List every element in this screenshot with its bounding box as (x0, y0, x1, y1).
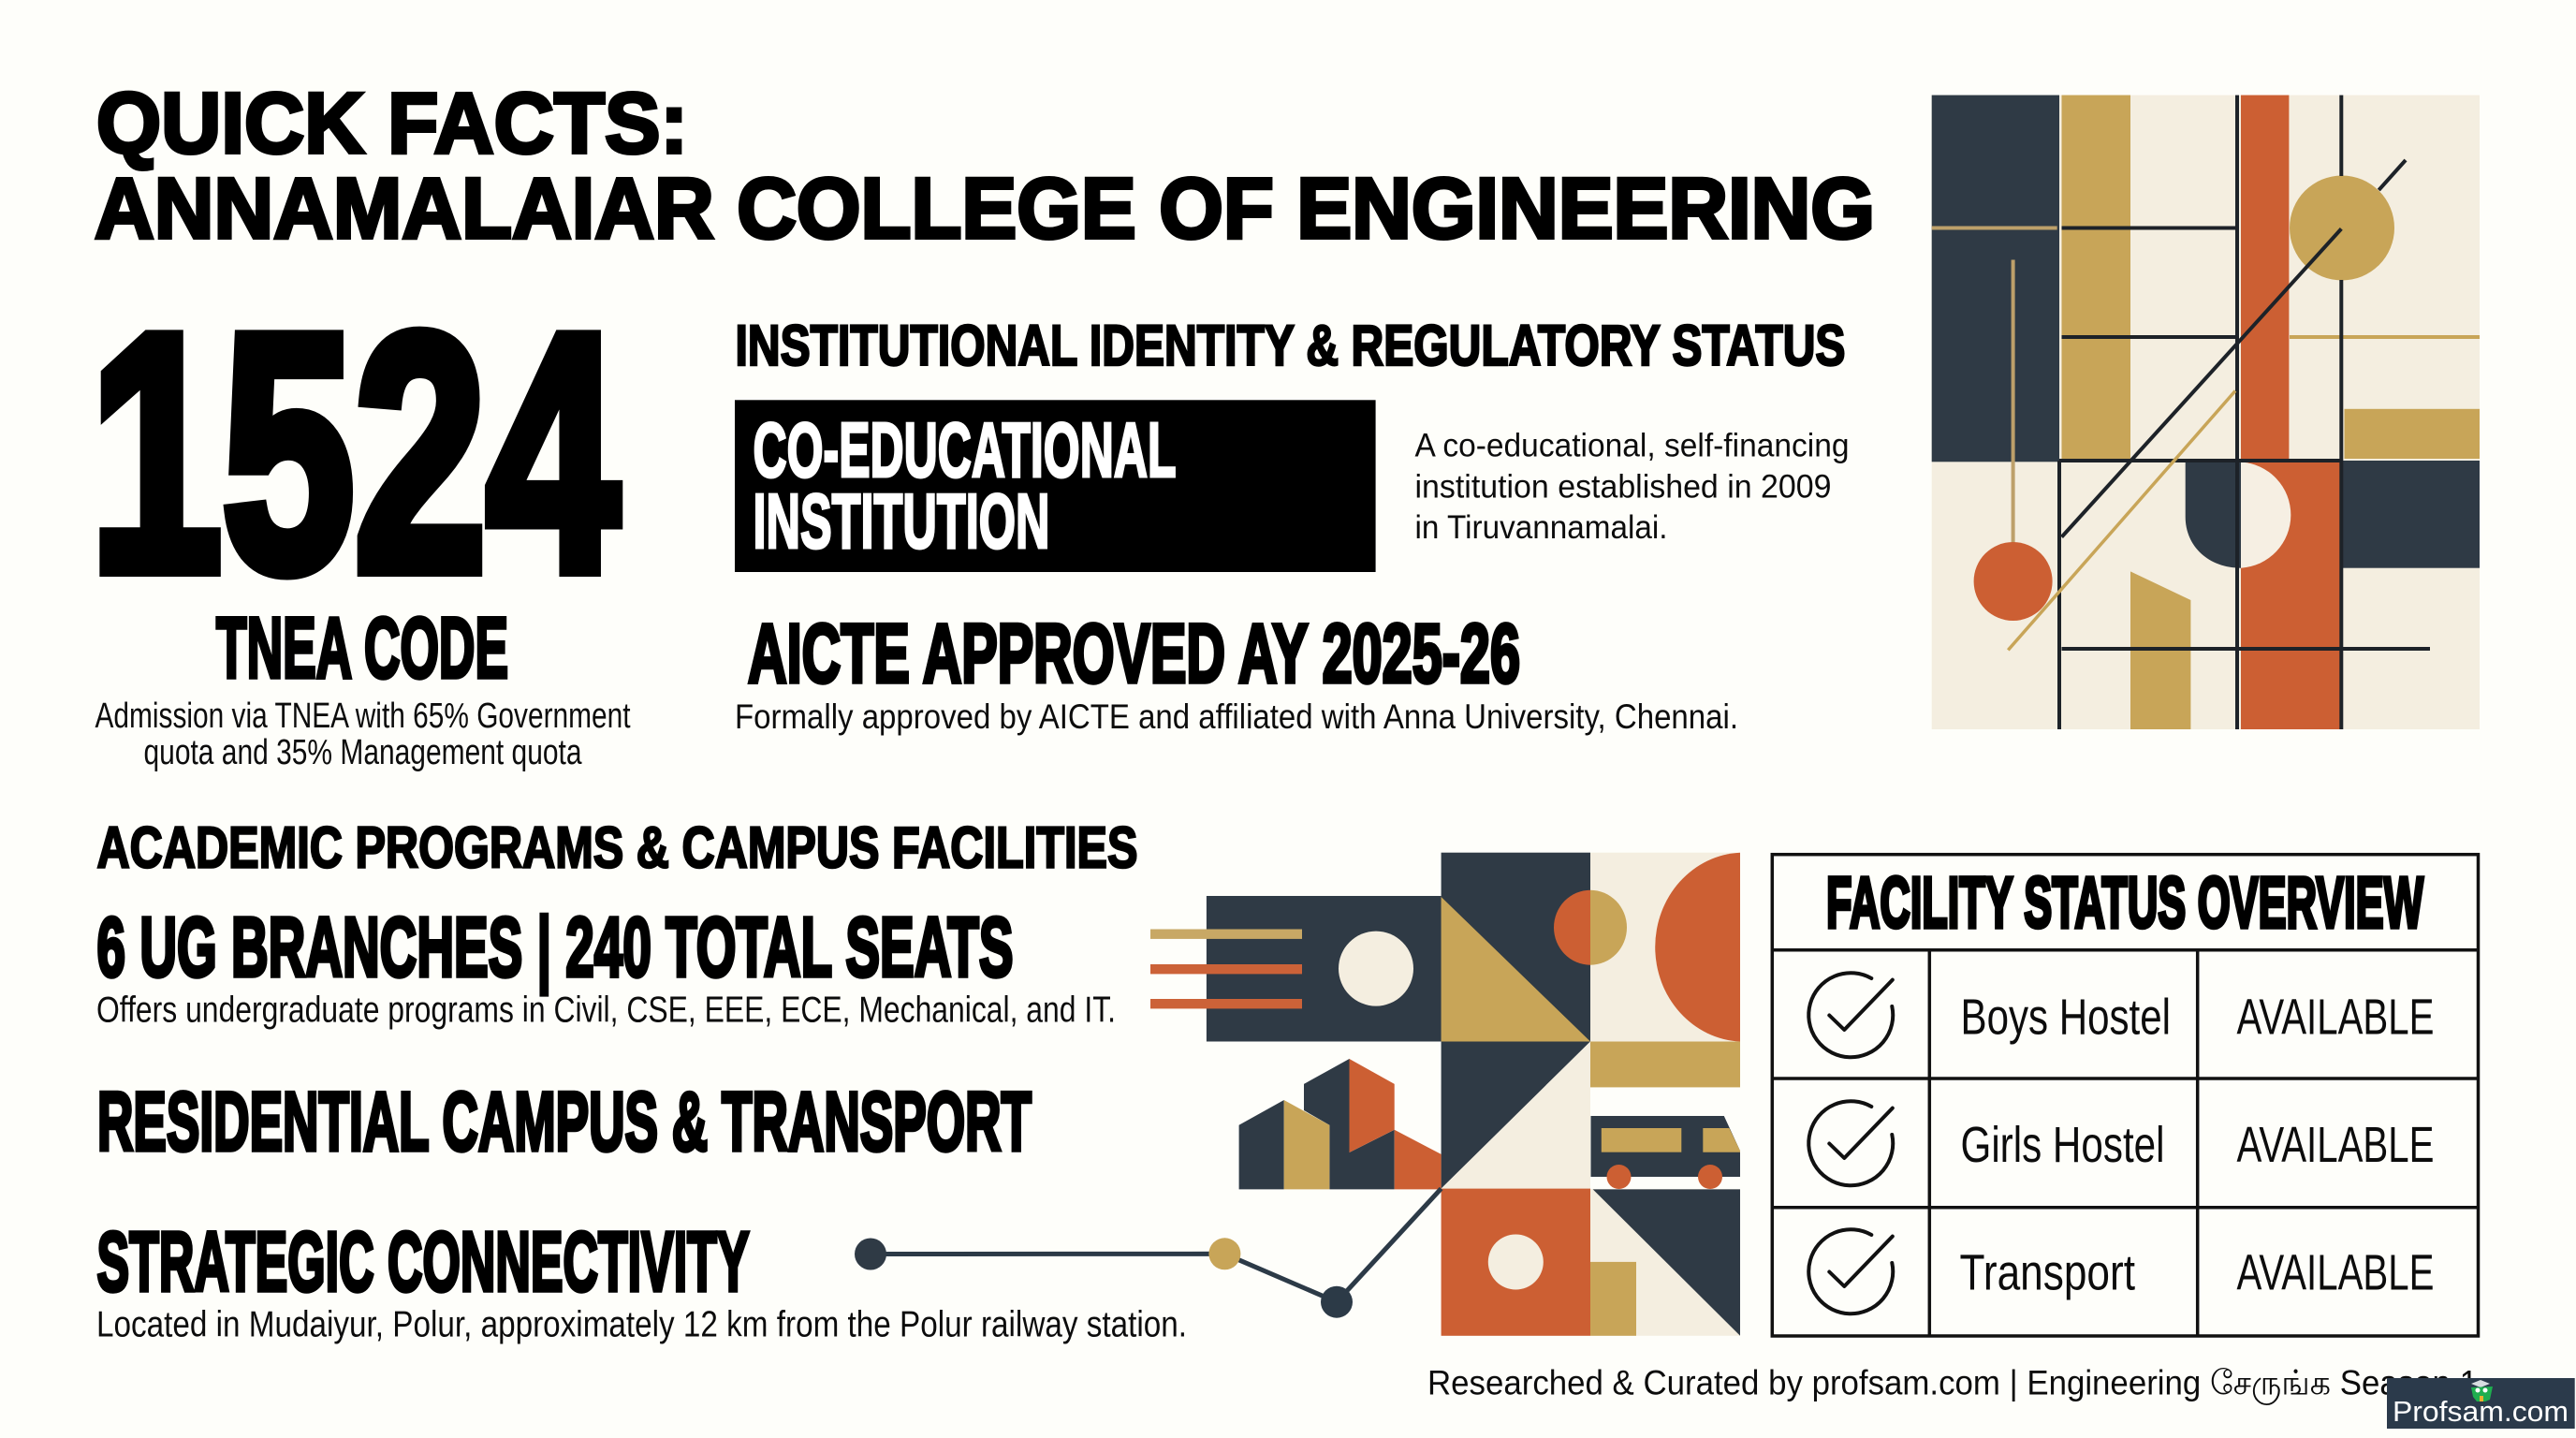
panel: co-educational institution (735, 400, 1376, 572)
row: transport: Transport (1960, 1244, 2135, 1300)
text: institution description: in Tiruvannamalai. (1415, 509, 1668, 546)
illustration: abstract geometric art top right (1932, 95, 2480, 729)
logo badge: Profsam.com (2387, 1378, 2575, 1429)
heading: branches and seats: 6 UG BRANCHES | 240 TOTAL SEATS (97, 901, 1013, 996)
heading: AICTE approved: AICTE APPROVED AY 2025-26 (748, 607, 1520, 700)
icon: lower right triangles (1590, 1189, 1740, 1336)
footer credit: Researched & Curated by profsam.com | Engineering சேருங்க Season 1 (1427, 1363, 2478, 1404)
text: location description: Located in Mudaiyur, Polur, approximately 12 km from the Polur railway station. (96, 1305, 1187, 1344)
illustration: geometric art with bus, buildings and route (855, 853, 1740, 1336)
text: admission description (95, 697, 631, 772)
row: transport: AVAILABLE (2237, 1244, 2434, 1300)
icon: banner block with circle (1150, 896, 1442, 1041)
icon: buildings (1239, 1059, 1442, 1189)
text: AICTE description: Formally approved by AICTE and affiliated with Anna University, Chennai. (735, 697, 1738, 736)
row: girls hostel: Girls Hostel (1960, 1117, 2164, 1173)
panel: co-educational institution: INSTITUTION (753, 477, 1050, 565)
row: boys hostel: Boys Hostel (1960, 989, 2171, 1045)
icon: centre triangles (1442, 1041, 1590, 1189)
title (95, 76, 1875, 257)
heading: academic programs: ACADEMIC PROGRAMS & CAMPUS FACILITIES (97, 816, 1138, 880)
text: institution description: institution established in 2009 (1415, 469, 1831, 506)
row: boys hostel: AVAILABLE (2237, 989, 2434, 1045)
text: institution description (1415, 428, 1850, 546)
icon: bus (1591, 1116, 1740, 1189)
icon: top mosaic (1442, 853, 1740, 1087)
title: QUICK FACTS: (96, 76, 688, 171)
row: boys hostel (1808, 973, 2434, 1057)
heading: residential campus: RESIDENTIAL CAMPUS & TRANSPORT (97, 1075, 1032, 1168)
row: transport (1808, 1229, 2434, 1313)
text: institution description: A co-educational, self-financing (1415, 428, 1850, 464)
heading: institutional identity: INSTITUTIONAL IDENTITY & REGULATORY STATUS (736, 314, 1846, 377)
icon: orange square with circle (1442, 1189, 1590, 1336)
row: girls hostel (1808, 1101, 2434, 1185)
text: admission description: Admission via TNEA with 65% Government (95, 697, 631, 736)
icon: route line with nodes (855, 1189, 1442, 1318)
text: programs description: Offers undergraduate programs in Civil, CSE, EEE, ECE, Mechanical, and IT. (96, 990, 1116, 1030)
heading: strategic connectivity: STRATEGIC CONNECTIVITY (97, 1215, 749, 1309)
heading: TNEA code: TNEA CODE (216, 601, 508, 697)
row: girls hostel: AVAILABLE (2237, 1117, 2434, 1173)
logo badge: Profsam.com: Profsam.com (2393, 1395, 2569, 1428)
text: admission description: quota and 35% Management quota (144, 733, 582, 772)
icon: mascot (2471, 1380, 2493, 1401)
big number: TNEA code 1524: 1524 (90, 265, 621, 641)
panel: co-educational institution: CO-EDUCATIONAL (753, 406, 1176, 493)
table: facility status overview (1772, 855, 2479, 1336)
title: ANNAMALAIAR COLLEGE OF ENGINEERING (95, 161, 1875, 257)
